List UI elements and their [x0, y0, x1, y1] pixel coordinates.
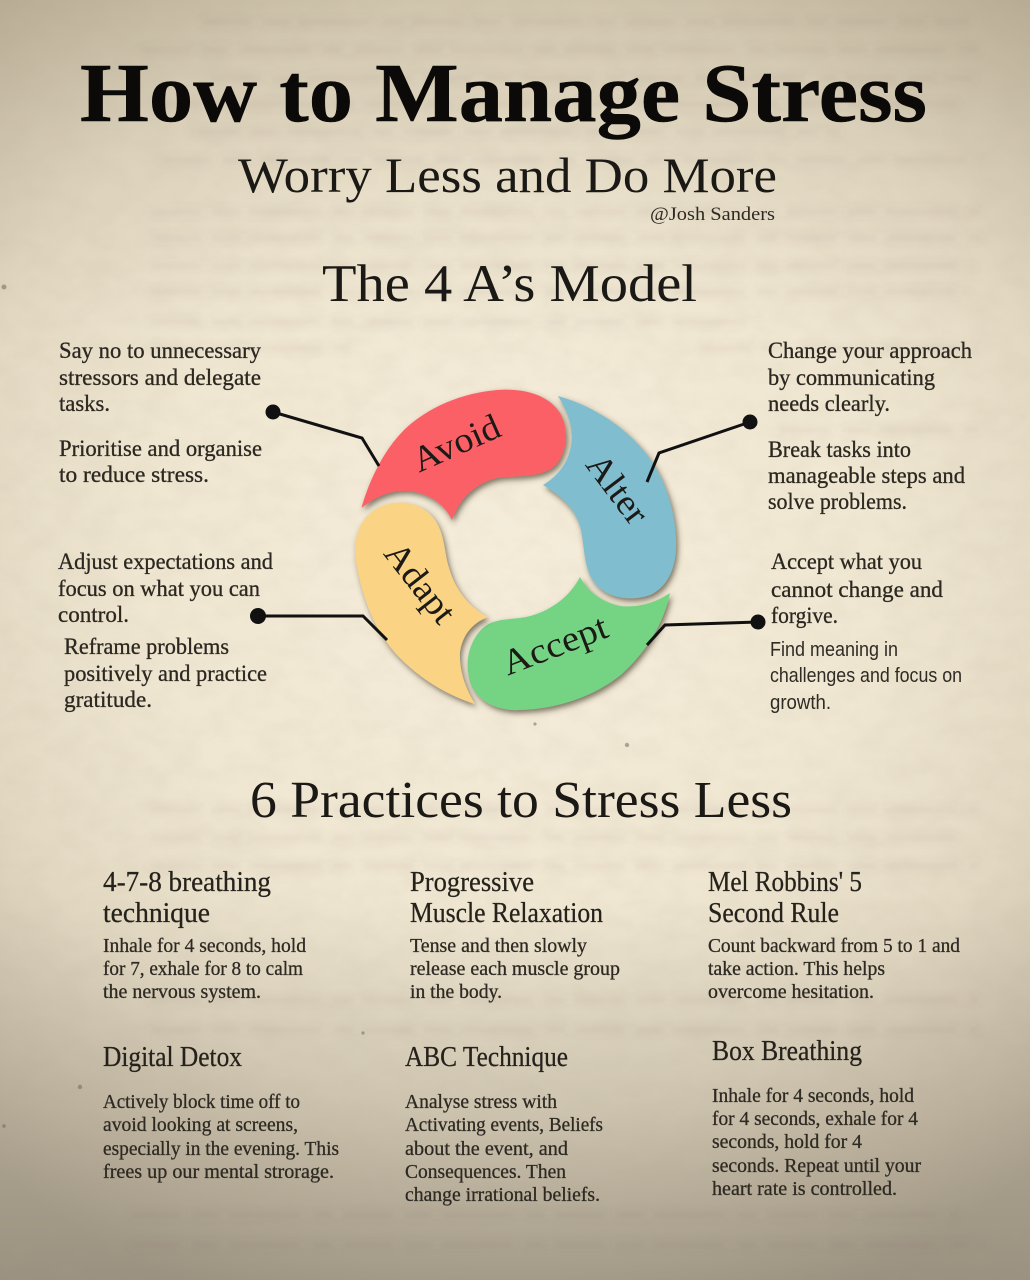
practice: 4-7-8 breathing: the nervous system.: [103, 981, 261, 1003]
text block: adapt: Reframe problems: [64, 634, 229, 659]
practice: 5 second rule: Count backward from 5 to 1 and: [708, 935, 960, 957]
practice: 5 second rule: take action. This helps: [708, 958, 885, 980]
text block: adapt: control.: [58, 602, 129, 627]
practice: abc technique: Activating events, Beliefs: [405, 1114, 603, 1136]
text block: adapt: focus on what you can: [58, 576, 260, 601]
practice: 5 second rule: Mel Robbins' 5: [708, 867, 862, 898]
label: adapt: Adapt: [376, 534, 465, 631]
practice: abc technique: change irrational beliefs.: [405, 1184, 600, 1206]
practice: box breathing: seconds, hold for 4: [712, 1131, 862, 1153]
practice: digital detox: frees up our mental strorage.: [103, 1161, 334, 1183]
diagram: 4 A's cycle: [355, 390, 676, 710]
practice: 4-7-8 breathing: for 7, exhale for 8 to calm: [103, 958, 303, 980]
practice: digital detox: Actively block time off to: [103, 1091, 300, 1113]
text block: accept: Accept what you: [771, 549, 922, 574]
practice: 5 second rule: overcome hesitation.: [708, 981, 874, 1003]
connector: alter: [647, 414, 758, 482]
text block: alter: [768, 338, 972, 514]
practice: digital detox: especially in the evening. This: [103, 1138, 339, 1160]
label: alter: Alter: [578, 446, 657, 532]
practice: digital detox: [103, 1042, 339, 1183]
subtitle: Worry Less and Do More: [238, 147, 777, 203]
practice: progressive muscle relaxation: Muscle Relaxation: [410, 898, 603, 929]
connector: accept: [647, 614, 766, 645]
practice: abc technique: ABC Technique: [405, 1042, 568, 1073]
practice: box breathing: [712, 1036, 921, 1200]
connector: avoid: [266, 404, 379, 466]
segment: adapt: [355, 502, 488, 704]
text block: adapt: [58, 549, 273, 712]
text block: avoid: to reduce stress.: [59, 462, 209, 487]
practice: 4-7-8 breathing: 4-7-8 breathing: [103, 867, 271, 898]
author credit: @Josh Sanders: [650, 204, 775, 225]
text block: alter: Change your approach: [768, 338, 972, 363]
text block: avoid: Prioritise and organise: [59, 436, 262, 461]
heading: 6 practices: 6 Practices to Stress Less: [250, 772, 792, 829]
practice: digital detox: Digital Detox: [103, 1042, 242, 1073]
text block: accept: forgive.: [771, 603, 838, 628]
text block: avoid: Say no to unnecessary: [59, 338, 261, 363]
practice: abc technique: Analyse stress with: [405, 1091, 557, 1113]
text block: adapt: positively and practice: [64, 661, 267, 686]
segment: accept: [468, 577, 670, 710]
text block: avoid: tasks.: [59, 391, 110, 416]
text block: accept: challenges and focus on: [770, 665, 962, 687]
practice: progressive muscle relaxation: Progressive: [410, 867, 534, 898]
segment: avoid: [362, 390, 566, 520]
practice: 4-7-8 breathing: technique: [103, 898, 210, 929]
text block: alter: needs clearly.: [768, 391, 890, 416]
practice: box breathing: Inhale for 4 seconds, hold: [712, 1085, 914, 1107]
practice: 5 second rule: [708, 867, 960, 1003]
label: accept: Accept: [496, 606, 613, 683]
practice: abc technique: Consequences. Then: [405, 1161, 566, 1183]
label: avoid: Avoid: [406, 406, 506, 480]
text block: alter: manageable steps and: [768, 463, 965, 488]
text block: alter: Break tasks into: [768, 437, 911, 462]
practice: 4-7-8 breathing: Inhale for 4 seconds, hold: [103, 935, 306, 957]
segment: alter: [543, 396, 676, 598]
practice: progressive muscle relaxation: Tense and then slowly: [410, 935, 588, 957]
text block: adapt: gratitude.: [64, 687, 152, 712]
practice: box breathing: seconds. Repeat until your: [712, 1155, 921, 1177]
text block: avoid: stressors and delegate: [59, 365, 261, 390]
practice: abc technique: [405, 1042, 603, 1206]
text block: accept: [770, 549, 962, 714]
practice: 5 second rule: Second Rule: [708, 898, 839, 929]
text block: accept: cannot change and: [771, 577, 943, 602]
practice: 4-7-8 breathing: [103, 867, 306, 1003]
text block: alter: solve problems.: [768, 489, 907, 514]
practice: progressive muscle relaxation: in the body.: [410, 981, 502, 1003]
text block: adapt: Adjust expectations and: [58, 549, 273, 574]
practice: abc technique: about the event, and: [405, 1138, 568, 1160]
title: How to Manage Stress: [80, 47, 927, 140]
text block: accept: Find meaning in: [770, 639, 898, 661]
practice: box breathing: heart rate is controlled.: [712, 1178, 897, 1200]
practice: progressive muscle relaxation: [410, 867, 620, 1003]
text block: accept: growth.: [770, 692, 831, 714]
practice: progressive muscle relaxation: release each muscle group: [410, 958, 620, 980]
practice: digital detox: avoid looking at screens,: [103, 1114, 298, 1136]
practice: box breathing: Box Breathing: [712, 1036, 862, 1067]
practice: box breathing: for 4 seconds, exhale for 4: [712, 1108, 918, 1130]
text block: alter: by communicating: [768, 365, 935, 390]
heading: the 4 A's model: The 4 A’s Model: [322, 255, 697, 313]
connector: adapt: [250, 608, 387, 640]
text block: avoid: [59, 338, 262, 487]
